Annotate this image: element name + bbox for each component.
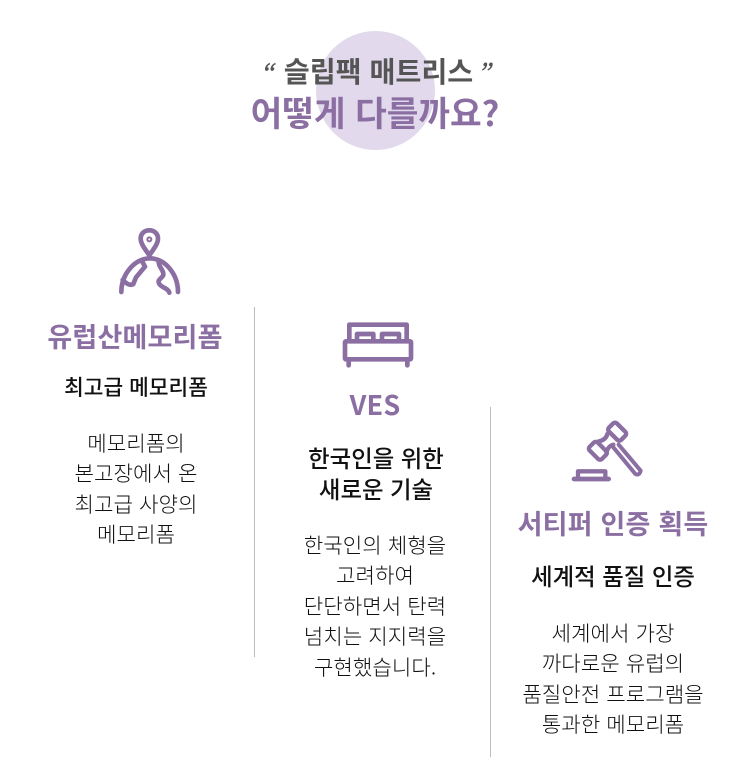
description: 통과한 메모리폼 xyxy=(542,708,684,739)
subheading: 최고급 메모리폼 xyxy=(64,371,208,402)
subheading xyxy=(308,440,444,505)
description: 단단하면서 탄력 xyxy=(304,590,446,621)
description: 메모리폼의 xyxy=(87,427,185,458)
icon: bed xyxy=(342,322,414,368)
title xyxy=(251,50,499,136)
divider 2 xyxy=(490,407,491,757)
title: “ 슬립팩 매트리스 ” xyxy=(260,50,490,91)
description: 메모리폼 xyxy=(97,518,175,549)
divider 1 xyxy=(254,307,255,657)
icon: globe with pin xyxy=(119,228,180,295)
title circle xyxy=(316,31,435,150)
description: 한국인의 체형을 xyxy=(304,529,446,560)
panel: VES xyxy=(304,322,446,682)
description xyxy=(304,529,446,682)
description: 구현했습니다. xyxy=(314,651,436,682)
description: 고려하여 xyxy=(336,559,414,590)
heading: VES xyxy=(350,384,400,423)
description: 까다로운 유럽의 xyxy=(542,647,684,678)
panel: Certipur certification xyxy=(518,420,708,739)
description: 최고급 사양의 xyxy=(75,488,197,519)
heading: 서티퍼 인증 획득 xyxy=(518,503,708,542)
subheading: 한국인을 위한 xyxy=(308,440,444,474)
description: 세계에서 가장 xyxy=(552,617,674,648)
icon: gavel xyxy=(572,420,643,482)
subheading: 새로운 기술 xyxy=(319,471,433,505)
description: 넘치는 지지력을 xyxy=(304,620,446,651)
subheading: 세계적 품질 인증 xyxy=(531,558,695,592)
description: 품질안전 프로그램을 xyxy=(522,678,704,709)
description: 본고장에서 온 xyxy=(75,457,197,488)
title: 어떻게 다를까요? xyxy=(251,86,499,136)
description xyxy=(75,427,197,549)
description xyxy=(522,617,704,739)
heading: 유럽산메모리폼 xyxy=(47,316,223,355)
panel: European memory foam xyxy=(47,228,223,549)
